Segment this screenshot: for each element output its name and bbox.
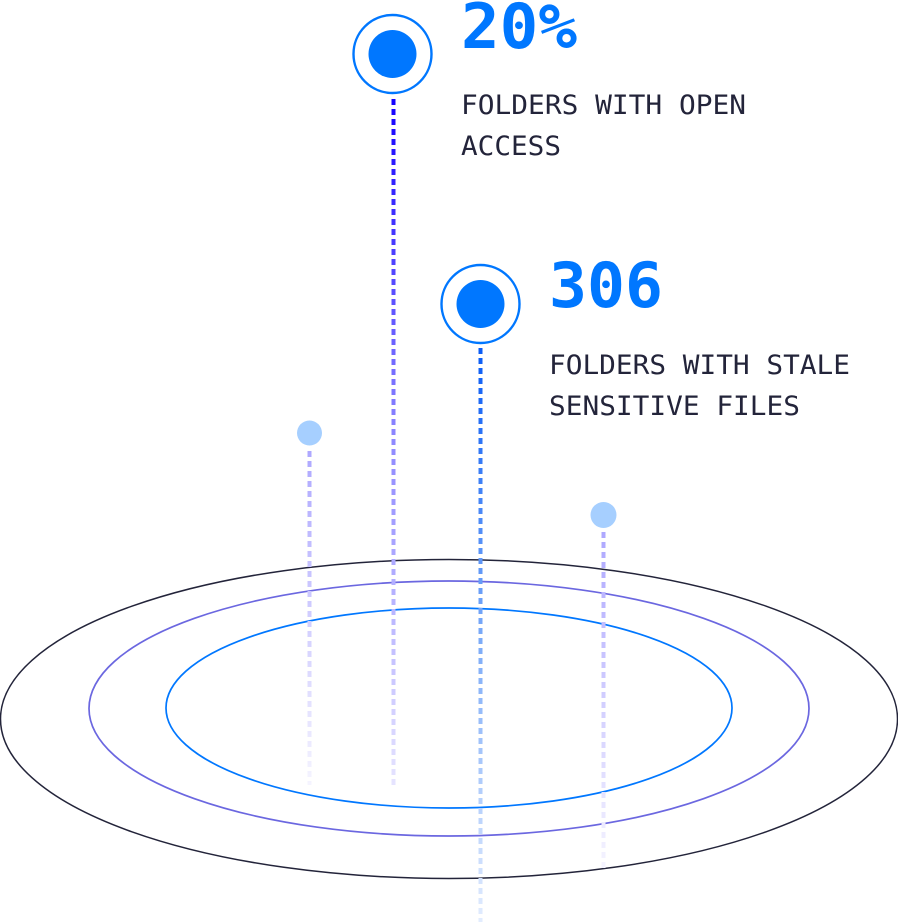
inner ellipse (166, 608, 732, 808)
outer ellipse (0, 560, 898, 878)
label: folders with stale sensitive files: FOLDERS WITH STALE (549, 350, 850, 381)
stat: 306: 306 (549, 249, 663, 322)
label: folders with open access: ACCESS (461, 131, 561, 162)
minor marker left (297, 420, 322, 785)
label: folders with open access: FOLDERS WITH OPEN (461, 90, 746, 121)
minor marker right (590, 502, 616, 868)
marker: stale files (442, 265, 520, 922)
middle ellipse (89, 581, 809, 836)
label: folders with stale sensitive files: SENSITIVE FILES (549, 391, 800, 422)
marker: open access (354, 15, 432, 785)
